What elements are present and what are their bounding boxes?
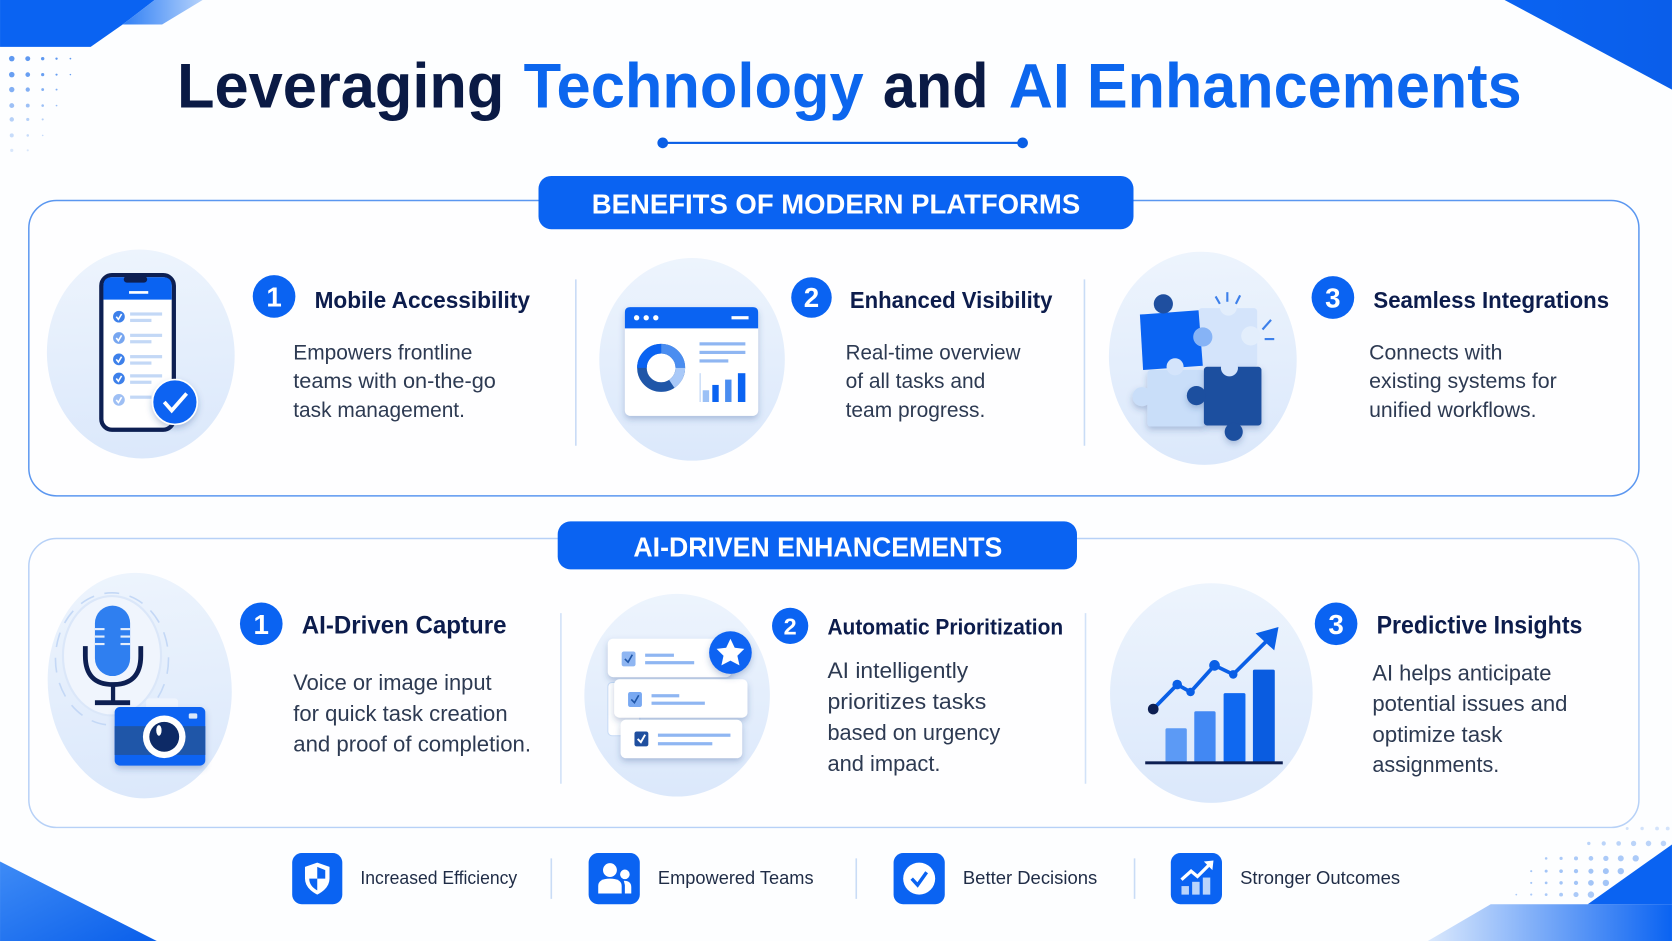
description: and impact. [827,751,940,776]
description: optimize task [1372,722,1503,747]
heading: Predictive Insights [1377,612,1582,639]
decorative corner: top right [1505,0,1672,90]
outcomes row [292,853,1400,904]
description: based on urgency [827,720,1000,745]
benefit 2: enhanced visibility [791,277,1052,422]
icon: microphone and camera [35,562,245,809]
outcome: better decisions: Better Decisions [963,867,1097,888]
number badge [253,275,295,318]
decorative corner: bottom left [0,862,157,941]
enhancement 2: automatic prioritization [772,608,1063,776]
description: existing systems for [1369,369,1557,393]
panel: AI-driven enhancements [29,521,1639,827]
description: Voice or image input [293,670,492,695]
title: AI Enhancements [1009,52,1522,122]
outcome: stronger outcomes: Stronger Outcomes [1240,867,1400,888]
outcome: empowered teams [589,853,814,904]
number badge: 2 [784,613,797,639]
number badge [1312,276,1354,319]
section heading: benefits [539,176,1133,229]
heading: AI-Driven Capture [302,612,507,639]
number badge [772,608,808,644]
decorative corner: top left [0,0,203,47]
description: prioritizes tasks [827,689,986,714]
dark piece [1187,367,1261,441]
sparks [1216,292,1274,339]
description: for quick task creation [293,701,508,726]
divider lines [561,613,1086,784]
heading: Enhanced Visibility [850,287,1052,313]
section heading: AI-driven: AI-DRIVEN ENHANCEMENTS [633,532,1002,563]
description: potential issues and [1372,691,1567,716]
benefit 3: seamless integrations [1312,276,1609,422]
decorative corner: bottom right [1428,845,1672,941]
number badge [1315,602,1357,645]
number badge: 3 [1325,283,1341,314]
icon: puzzle pieces [1102,245,1304,471]
description: AI intelligently [827,658,968,683]
section heading: benefits: BENEFITS OF MODERN PLATFORMS [592,188,1080,219]
enhancement 1: AI-driven capture [240,602,531,757]
benefit 1: mobile accessibility [253,275,530,422]
description: teams with on-the-go [293,369,496,393]
description: of all tasks and [846,369,985,393]
description [293,340,496,422]
description [1369,340,1557,422]
heading: Mobile Accessibility [315,287,530,313]
description: task management. [293,398,465,422]
number badge [791,277,832,318]
number badge: 3 [1328,609,1344,640]
outcome: increased efficiency: Increased Efficiency [360,867,518,888]
title: Technology [524,52,864,122]
heading: Seamless Integrations [1373,287,1609,313]
divider lines [576,279,1084,446]
number badge: 1 [254,609,269,640]
icon: prioritized task cards [584,594,770,797]
outcome: stronger outcomes [1171,853,1400,904]
icon: growth chart [1110,583,1313,803]
outcome: increased efficiency [292,853,518,904]
enhancement 3: predictive insights [1315,602,1582,777]
title: and [883,52,988,122]
description: and proof of completion. [293,732,531,757]
description: team progress. [846,398,985,422]
light piece [1199,299,1260,367]
description: Empowers frontline [293,340,472,364]
description: assignments. [1372,752,1499,777]
description [293,670,531,757]
title: Leveraging [177,52,504,122]
heading: Automatic Prioritization [827,614,1063,639]
panel: benefits of modern platforms [29,176,1639,496]
description: unified workflows. [1369,398,1537,422]
decorative dots: bottom right [1515,827,1670,898]
description [846,340,1021,422]
description [827,658,1000,776]
decorative dots: top left [9,56,71,152]
description [1372,660,1567,777]
outcome: better decisions [894,853,1097,904]
icon: dashboard window [599,258,785,461]
title [177,52,1522,122]
number badge [240,602,283,645]
blue piece [1140,294,1212,370]
section heading: AI-driven [558,521,1077,569]
icon: phone with checklist [40,243,242,465]
description: AI helps anticipate [1372,660,1551,685]
description: Real-time overview [846,340,1021,364]
title underline [657,138,1028,148]
outcome: empowered teams: Empowered Teams [658,867,814,888]
pale piece [1132,370,1205,427]
description: Connects with [1369,340,1502,364]
number badge: 1 [266,282,282,313]
number badge: 2 [804,282,819,313]
